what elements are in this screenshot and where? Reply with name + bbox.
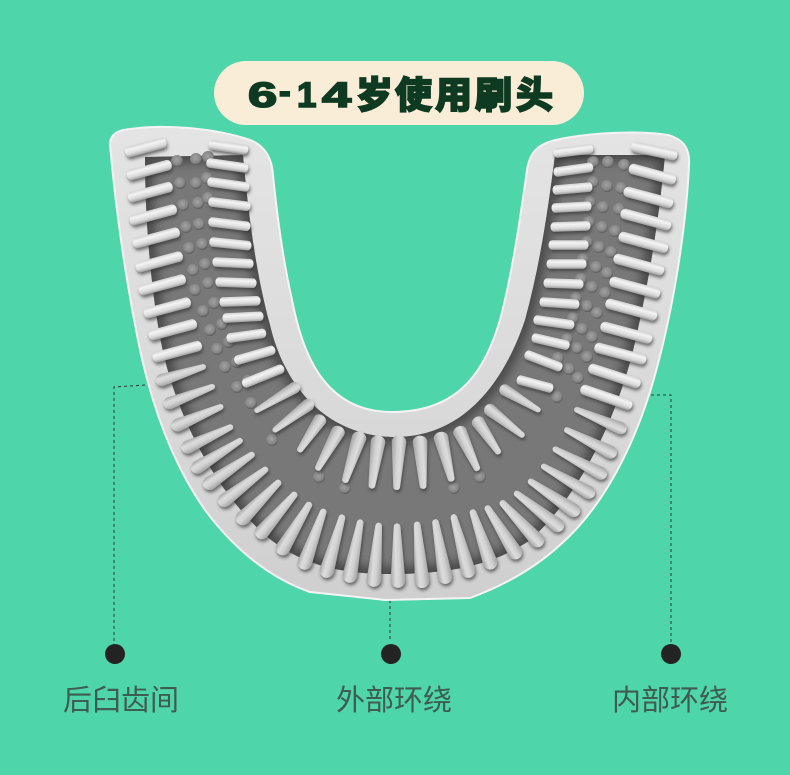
title text: 6-14: 4 xyxy=(322,76,351,115)
inner bristle row xyxy=(206,140,594,490)
title text: 6-14 xyxy=(248,72,351,115)
toothbrush head xyxy=(110,127,689,600)
marker dot: 内部环绕 xyxy=(661,644,681,664)
title text: 岁使用刷头: 岁使用刷头 xyxy=(356,65,553,119)
title text: 6-14: 1 xyxy=(297,76,316,115)
U-shaped silicone rim xyxy=(110,127,689,600)
title pill xyxy=(214,61,584,125)
small massage nubs xyxy=(171,151,630,494)
gray inner bed xyxy=(145,155,665,574)
label: 后臼齿间: 后臼齿间 xyxy=(63,684,179,717)
label: 内部环绕: 内部环绕 xyxy=(612,684,728,717)
leader line: 内部环绕 xyxy=(645,395,671,645)
leader line: 后臼齿间 xyxy=(114,385,145,645)
title text: 6-14: - xyxy=(279,72,291,111)
marker dot: 后臼齿间 xyxy=(105,644,125,664)
title text: 6-14: 6 xyxy=(248,76,277,115)
label: 外部环绕: 外部环绕 xyxy=(336,684,452,717)
marker dot: 外部环绕 xyxy=(381,644,401,664)
leader line: 外部环绕 xyxy=(389,600,391,642)
outer bristle row xyxy=(124,137,678,589)
